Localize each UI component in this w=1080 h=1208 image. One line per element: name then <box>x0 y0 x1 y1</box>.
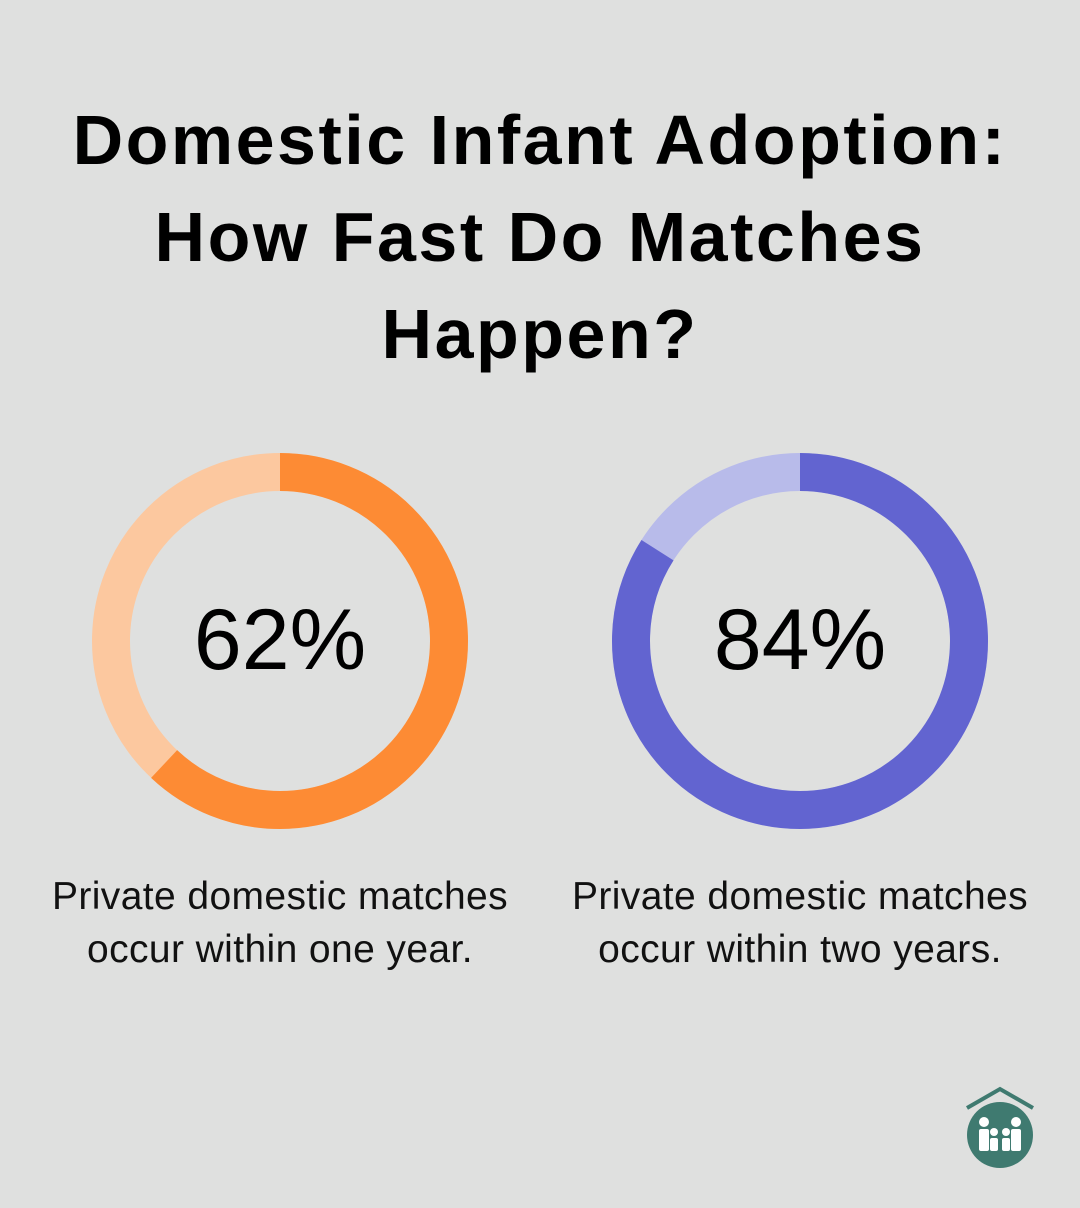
chart: donut 62%: 62% <box>194 592 366 688</box>
title: How Fast Do Matches <box>155 198 925 276</box>
caption left <box>52 875 508 971</box>
caption left: occur within one year. <box>87 928 473 971</box>
caption right: Private domestic matches <box>572 875 1028 918</box>
caption right: occur within two years. <box>598 928 1002 971</box>
chart: donut 62% <box>92 453 468 829</box>
icon: logo <box>966 1086 1034 1168</box>
title <box>73 101 1007 373</box>
caption left: Private domestic matches <box>52 875 508 918</box>
chart: donut 84%: 84% <box>714 592 886 688</box>
title: Happen? <box>382 295 698 373</box>
chart: donut 84% <box>612 453 988 829</box>
caption right <box>572 875 1028 971</box>
title: Domestic Infant Adoption: <box>73 101 1007 179</box>
